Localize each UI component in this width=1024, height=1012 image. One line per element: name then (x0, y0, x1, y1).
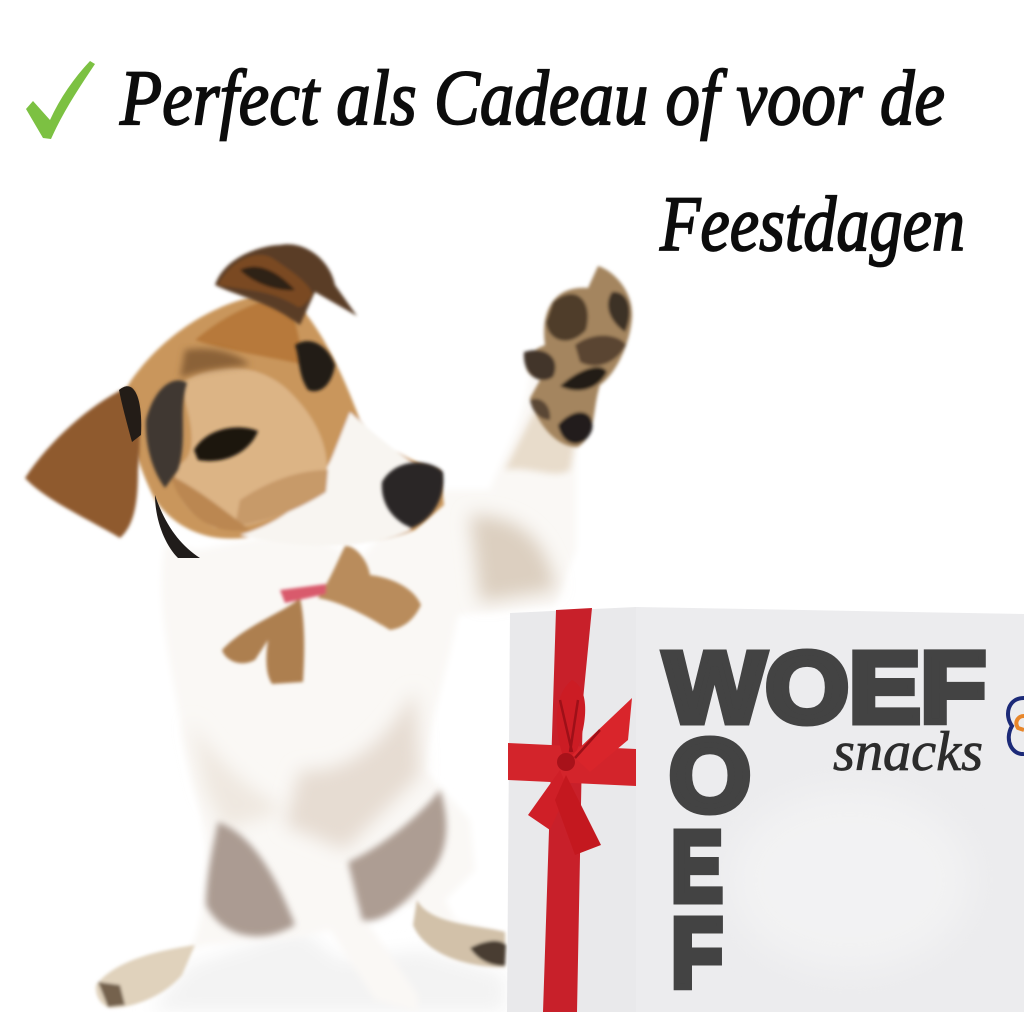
dog front foot (96, 945, 195, 1008)
dog illustration (25, 244, 632, 1012)
dog paw raised (524, 266, 632, 447)
dog collar shadow (155, 495, 200, 558)
brand wordmark vertical: F (671, 898, 723, 1008)
dog upper eye patch (295, 341, 335, 391)
arm shading (470, 515, 556, 602)
logo fragment at edge (1008, 698, 1024, 754)
brand wordmark vertical: E (671, 811, 723, 923)
brand sub-label snacks: snacks (833, 721, 983, 783)
box front panel (636, 607, 1024, 1012)
dog belly shadow left (206, 822, 295, 936)
dog dark face mask (146, 380, 187, 488)
red ribbon horizontal (508, 743, 636, 786)
box side panel (507, 607, 636, 1012)
gift box (507, 607, 1024, 1012)
dog head base (127, 292, 444, 546)
chew ear on head (215, 244, 357, 325)
dog left ear (25, 387, 140, 538)
icon: green check mark (26, 61, 95, 139)
dog nose (382, 463, 443, 528)
brand wordmark horizontal: WOEF (664, 632, 986, 744)
dog ear inner shade (119, 386, 141, 442)
red ribbon bow (528, 680, 632, 855)
head top shade (180, 349, 250, 378)
dog eye (194, 427, 258, 461)
title: line two: Feestdagen (659, 180, 965, 267)
red ribbon vertical (543, 608, 592, 1012)
brand wordmark vertical (669, 718, 751, 1008)
chew ear bow (222, 546, 421, 684)
dog belly shadow right (348, 790, 446, 921)
dog rear foot (413, 900, 506, 967)
body warm shading (285, 690, 420, 850)
dog body (162, 375, 590, 1012)
brand wordmark vertical: O (669, 718, 751, 833)
ground shadow (150, 928, 505, 1012)
